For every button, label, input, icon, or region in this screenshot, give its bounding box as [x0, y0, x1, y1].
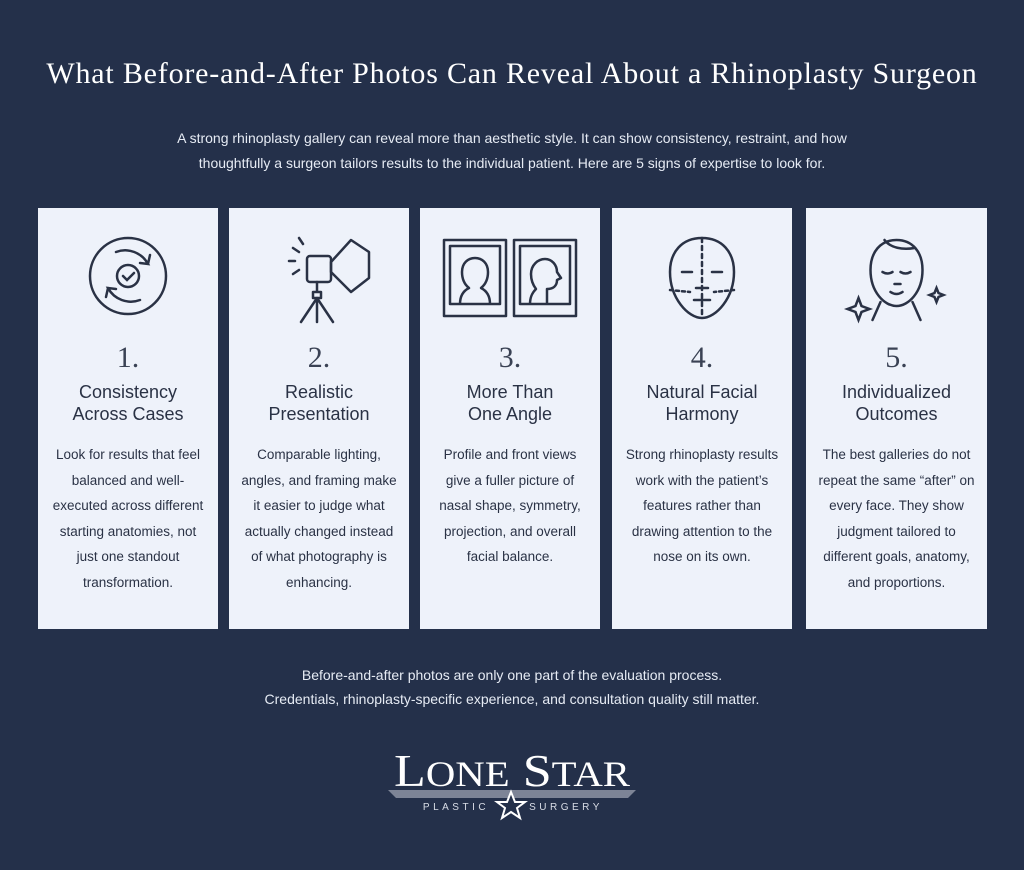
- text: Comparable lighting, angles, and framing make it easier to judge what actually changed instead of what photography is enhancing.: [241, 447, 397, 590]
- number: 4.: [691, 341, 713, 374]
- number: 1.: [117, 341, 139, 374]
- logo: SURGERY: [529, 802, 603, 813]
- number: 3.: [499, 341, 521, 374]
- icon: two portraits: [442, 238, 578, 318]
- heading: Across Cases: [72, 404, 184, 424]
- heading: Realistic: [285, 382, 353, 402]
- heading: [72, 382, 184, 424]
- heading: [646, 382, 758, 424]
- icon: studio light: [288, 236, 370, 324]
- footer note: Before-and-after photos are only one part of the evaluation process.: [302, 667, 722, 683]
- logo: [388, 745, 636, 820]
- heading: [268, 382, 370, 424]
- heading: Natural Facial: [646, 382, 758, 402]
- title: What Before-and-After Photos Can Reveal About a Rhinoplasty Surgeon: [46, 57, 978, 90]
- panel: realistic: [229, 208, 409, 629]
- text: Profile and front views give a fuller picture of nasal shape, symmetry, projection, and overall facial balance.: [439, 447, 581, 564]
- panel: angles: [420, 208, 600, 629]
- text: Strong rhinoplasty results work with the patient’s features rather than drawing attention to the nose on its own.: [626, 447, 778, 564]
- heading: Presentation: [268, 404, 370, 424]
- logo: PLASTIC: [423, 802, 489, 813]
- number: 2.: [308, 341, 330, 374]
- panel: harmony: [612, 208, 792, 629]
- icon: cycle check: [88, 236, 168, 316]
- heading: Outcomes: [855, 404, 938, 424]
- footer note: [265, 667, 759, 707]
- panel: consistency: [38, 208, 218, 629]
- icon: face with sparkles: [844, 238, 947, 324]
- intro text: [177, 130, 847, 171]
- intro text: thoughtfully a surgeon tailors results to the individual patient. Here are 5 signs of expertise to look for.: [199, 155, 825, 171]
- panel: individualized: [806, 208, 987, 629]
- heading: [467, 382, 553, 424]
- text: The best galleries do not repeat the same “after” on every face. They show judgment tailored to different goals, anatomy, and proportions.: [818, 447, 975, 590]
- number: 5.: [885, 341, 908, 374]
- footer note: Credentials, rhinoplasty-specific experience, and consultation quality still matter.: [265, 691, 759, 707]
- logo: LONE STAR: [394, 745, 630, 796]
- heading: Consistency: [79, 382, 177, 402]
- intro text: A strong rhinoplasty gallery can reveal more than aesthetic style. It can show consistency, restraint, and how: [177, 130, 847, 146]
- heading: Individualized: [842, 382, 951, 402]
- text: Look for results that feel balanced and well-executed across different starting anatomies, not just one standout transformation.: [53, 447, 203, 590]
- heading: One Angle: [468, 404, 552, 424]
- icon: face symmetry: [668, 236, 736, 320]
- heading: More Than: [467, 382, 553, 402]
- heading: [842, 382, 951, 424]
- heading: Harmony: [665, 404, 739, 424]
